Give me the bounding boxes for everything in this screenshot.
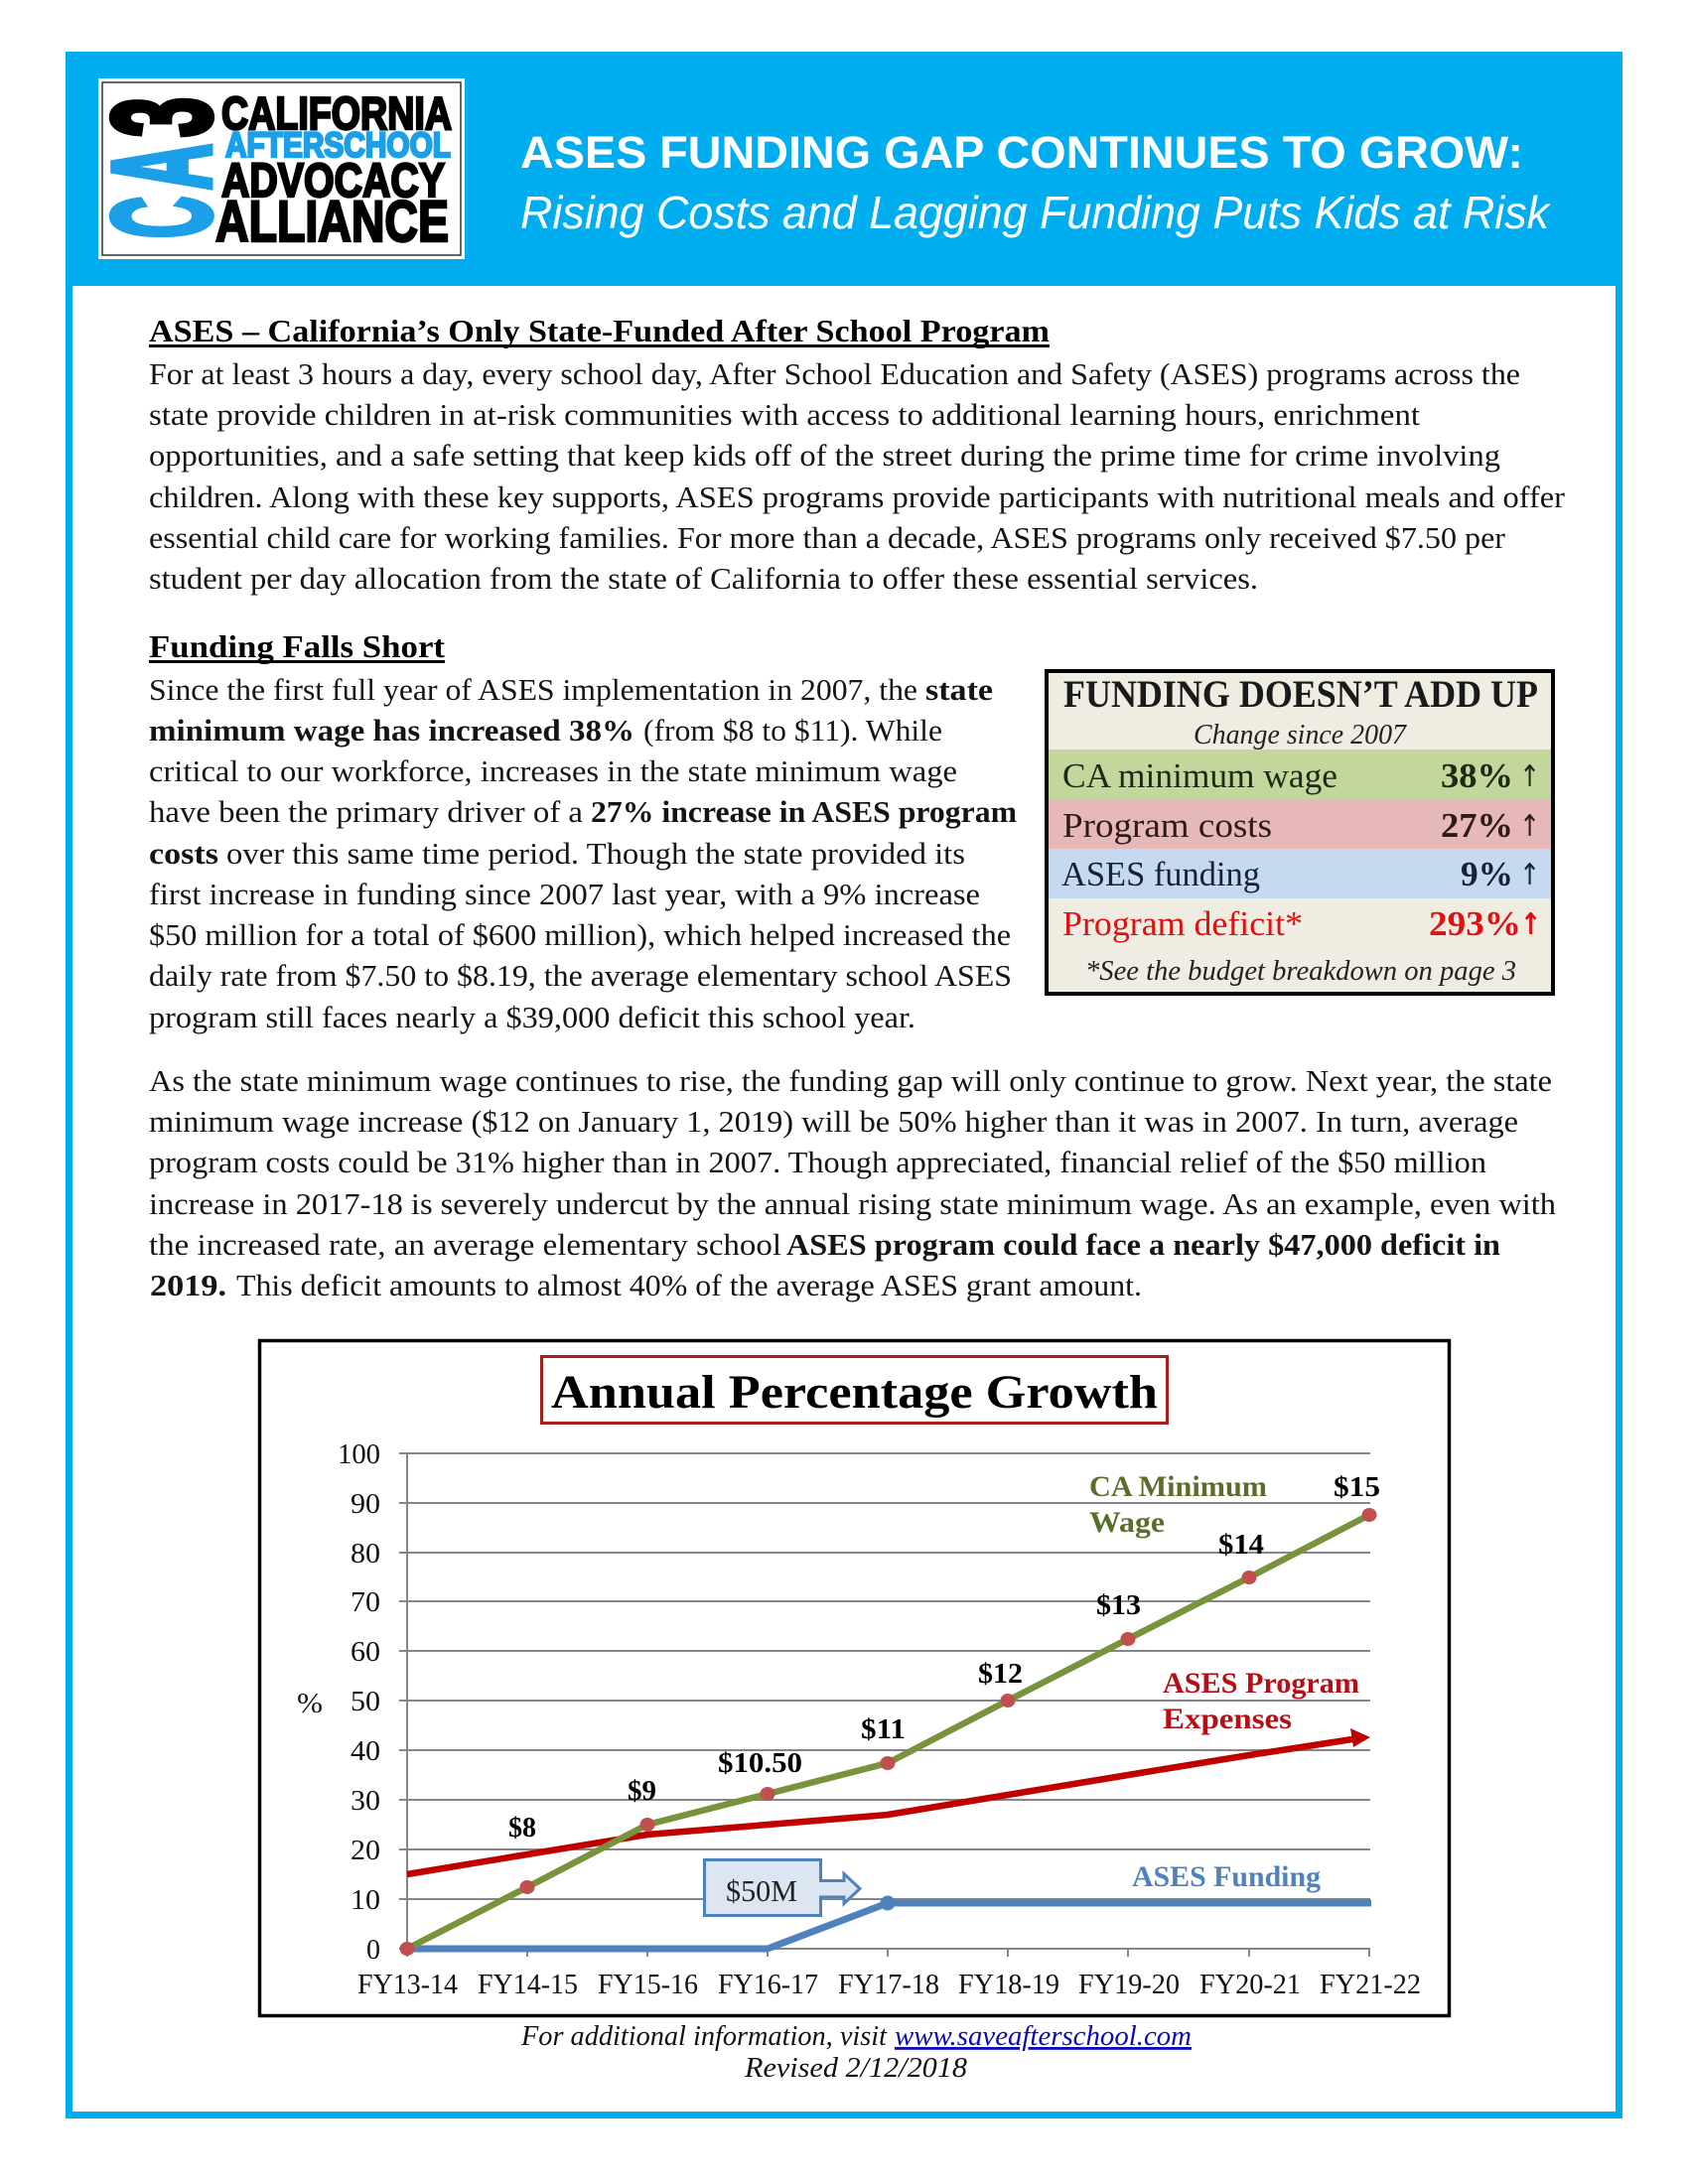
row: program deficit (1062, 904, 1541, 943)
row: CA minimum wage (1049, 750, 1551, 799)
x axis labels: FY16-17 (718, 1970, 818, 2000)
text block: rising wage paragraph: program costs could be 31% higher than in 2007. Though appreciated, financial relief of the $50 million (149, 1145, 1487, 1179)
minimum wage value labels: $12 (978, 1659, 1023, 1690)
y axis labels (338, 1439, 380, 1966)
y axis labels: 20 (351, 1836, 380, 1866)
text block: rising wage paragraph: 2019. (150, 1268, 226, 1302)
x axis labels: FY21-22 (1320, 1970, 1421, 2000)
series label: ASES program expenses: ASES Program (1163, 1667, 1359, 1700)
y axis unit: % (297, 1689, 323, 1719)
text block: funding falls short paragraph: program still faces nearly a $39,000 deficit this school year. (149, 1000, 915, 1034)
text block: ASES intro paragraph: For at least 3 hours a day, every school day, After School Education and Safety (ASES) programs across the (149, 356, 1520, 391)
row: ASES funding (1049, 849, 1551, 898)
text block: rising wage paragraph: minimum wage increase ($12 on January 1, 2019) will be 50% higher than it was in 2007. In turn, average (149, 1104, 1518, 1139)
minimum wage value labels: $8 (508, 1813, 536, 1843)
y axis labels: 100 (338, 1439, 380, 1470)
text block: funding falls short paragraph: 27% increase in ASES program (591, 794, 1017, 829)
text block: funding falls short paragraph: state (925, 672, 993, 707)
x axis labels: FY13-14 (357, 1970, 458, 2000)
row: CA minimum wage: ↑ (1519, 759, 1540, 794)
minimum wage value labels: $13 (1096, 1590, 1141, 1621)
text block: ASES intro paragraph: children. Along with these key supports, ASES programs provide participants with nutritional meals and offer (149, 479, 1566, 514)
text block: funding falls short paragraph: have been the primary driver of a (149, 794, 583, 829)
series label: ASES program expenses: Expenses (1163, 1703, 1292, 1735)
text block: funding falls short paragraph: $50 million for a total of $600 million), which helped increased the (149, 917, 1011, 952)
callout: $50M (705, 1860, 860, 1916)
line: ASES funding (407, 1896, 1371, 1949)
row: ASES funding: 9% (1461, 855, 1513, 893)
logo: California Afterschool Advocacy Alliance: 3 (83, 97, 239, 137)
text block: ASES intro paragraph: state provide children in at-risk communities with access to additional learning hours, enrichment (149, 397, 1420, 432)
row: program costs: 27% (1441, 806, 1513, 845)
row: program deficit: 293% (1429, 904, 1521, 943)
x axis labels: FY15-16 (598, 1970, 698, 2000)
subtitle: Rising Costs and Lagging Funding Puts Kids at Risk (520, 187, 1551, 238)
logo: California Afterschool Advocacy Alliance: A (83, 144, 239, 190)
text block: rising wage paragraph: This deficit amounts to almost 40% of the average ASES grant amount. (236, 1268, 1142, 1302)
row: ASES funding: ↑ (1519, 858, 1540, 892)
minimum wage value labels: $10.50 (718, 1748, 802, 1779)
y axis labels: 10 (351, 1885, 380, 1916)
logo: California Afterschool Advocacy Alliance: C (83, 197, 239, 238)
heading: Funding Falls Short: Funding Falls Short (149, 628, 445, 664)
y axis labels: 90 (351, 1489, 380, 1520)
footer note: For additional information, visit (520, 2021, 888, 2052)
panel: funding doesn't add up (1047, 671, 1553, 994)
minimum wage value labels: $15 (1334, 1472, 1380, 1503)
logo: California Afterschool Advocacy Alliance (83, 78, 465, 259)
logo: California Afterschool Advocacy Alliance: CALIFORNIA (221, 87, 452, 139)
logo: California Afterschool Advocacy Alliance: ADVOCACY (221, 155, 445, 207)
row: CA minimum wage: 38% (1441, 756, 1513, 795)
text block: funding falls short paragraph: daily rate from $7.50 to $8.19, the average elementary school ASES (149, 958, 1012, 993)
series label: CA minimum wage: CA Minimum (1089, 1470, 1267, 1503)
text block: funding falls short paragraph: over this same time period. Though the state provided its (226, 836, 965, 871)
panel heading: FUNDING DOESN’T ADD UP (1063, 673, 1538, 716)
series label: CA minimum wage (1089, 1470, 1267, 1539)
text block: ASES intro paragraph: opportunities, and a safe setting that keep kids off of the street during the prime time for crime involving (149, 438, 1500, 473)
y axis labels: 60 (351, 1637, 380, 1668)
row: ASES funding: ASES funding (1061, 855, 1260, 893)
y axis labels: 80 (351, 1539, 380, 1570)
title: ASES FUNDING GAP CONTINUES TO GROW: (520, 127, 1523, 178)
series label: ASES program expenses (1163, 1667, 1359, 1735)
panel subheading: Change since 2007 (1194, 720, 1407, 751)
panel footnote: *See the budget breakdown on page 3 (1085, 956, 1516, 987)
footer note: www.saveafterschool.com (895, 2021, 1192, 2052)
x axis labels (357, 1970, 1421, 2000)
row: program costs: Program costs (1062, 806, 1272, 845)
minimum wage value labels: $11 (861, 1714, 906, 1745)
callout: $50M: $50M (726, 1873, 797, 1908)
text block: rising wage paragraph: increase in 2017-18 is severely undercut by the annual rising state minimum wage. As an example, even with (149, 1186, 1557, 1221)
minimum wage value labels (508, 1472, 1380, 1843)
text block: funding falls short paragraph (149, 672, 1017, 1034)
x axis labels: FY19-20 (1078, 1970, 1180, 2000)
x axis labels: FY14-15 (478, 1970, 578, 2000)
text block: ASES intro paragraph: student per day allocation from the state of California to offer these essential services. (149, 561, 1258, 596)
y axis labels: 30 (351, 1786, 380, 1817)
minimum wage value labels: $14 (1218, 1530, 1264, 1561)
row: CA minimum wage: CA minimum wage (1062, 756, 1337, 795)
grid lines and axes (399, 1453, 1370, 1957)
logo: California Afterschool Advocacy Alliance: ALLIANCE (215, 190, 449, 254)
text block: funding falls short paragraph: first increase in funding since 2007 last year, with a 9% increase (149, 877, 980, 911)
header band (66, 52, 1622, 286)
text block: rising wage paragraph (149, 1063, 1557, 1302)
row: program costs (1049, 799, 1551, 849)
text block: funding falls short paragraph: Since the first full year of ASES implementation in 2007, the (149, 672, 917, 707)
text block: rising wage paragraph: the increased rate, an average elementary school (149, 1227, 781, 1262)
series label: CA minimum wage: Wage (1089, 1506, 1165, 1539)
text block: funding falls short paragraph: critical to our workforce, increases in the state minimum wage (149, 753, 957, 788)
logo: California Afterschool Advocacy Alliance: AFTERSCHOOL (225, 126, 451, 165)
text block: rising wage paragraph: As the state minimum wage continues to rise, the funding gap will only continue to grow. Next year, the state (149, 1063, 1552, 1098)
row: program deficit: ↑ (1520, 907, 1541, 942)
line: CA minimum wage (399, 1508, 1376, 1956)
footer note (520, 2021, 1192, 2084)
x axis labels: FY20-21 (1199, 1970, 1301, 2000)
row: program deficit: Program deficit* (1062, 904, 1303, 943)
text block: funding falls short paragraph: (from $8 to $11). While (643, 713, 942, 748)
x axis labels: FY18-19 (958, 1970, 1059, 2000)
chart title: Annual Percentage Growth (551, 1366, 1158, 1419)
text block: rising wage paragraph: ASES program could face a nearly $47,000 deficit in (786, 1227, 1500, 1262)
y axis labels: 0 (366, 1935, 380, 1966)
chart: annual percentage growth (260, 1340, 1450, 2015)
series label: ASES funding: ASES Funding (1132, 1860, 1321, 1893)
row: program costs: ↑ (1519, 809, 1540, 844)
text block: ASES intro paragraph: essential child care for working families. For more than a decade, ASES programs only received $7.50 per (149, 520, 1506, 555)
y axis labels: 70 (351, 1587, 380, 1618)
x axis labels: FY17-18 (838, 1970, 939, 2000)
line: ASES program expenses (407, 1728, 1370, 1874)
minimum wage value labels: $9 (628, 1776, 656, 1807)
footer note: Revised 2/12/2018 (744, 2053, 967, 2084)
text block: funding falls short paragraph: minimum wage has increased 38% (149, 713, 634, 748)
y axis labels: 40 (351, 1736, 380, 1767)
y axis labels: 50 (351, 1687, 380, 1717)
heading: ASES intro: ASES – California’s Only State-Funded After School Program (149, 313, 1050, 348)
text block: funding falls short paragraph: costs (149, 836, 218, 871)
text block: ASES intro paragraph (149, 356, 1566, 596)
